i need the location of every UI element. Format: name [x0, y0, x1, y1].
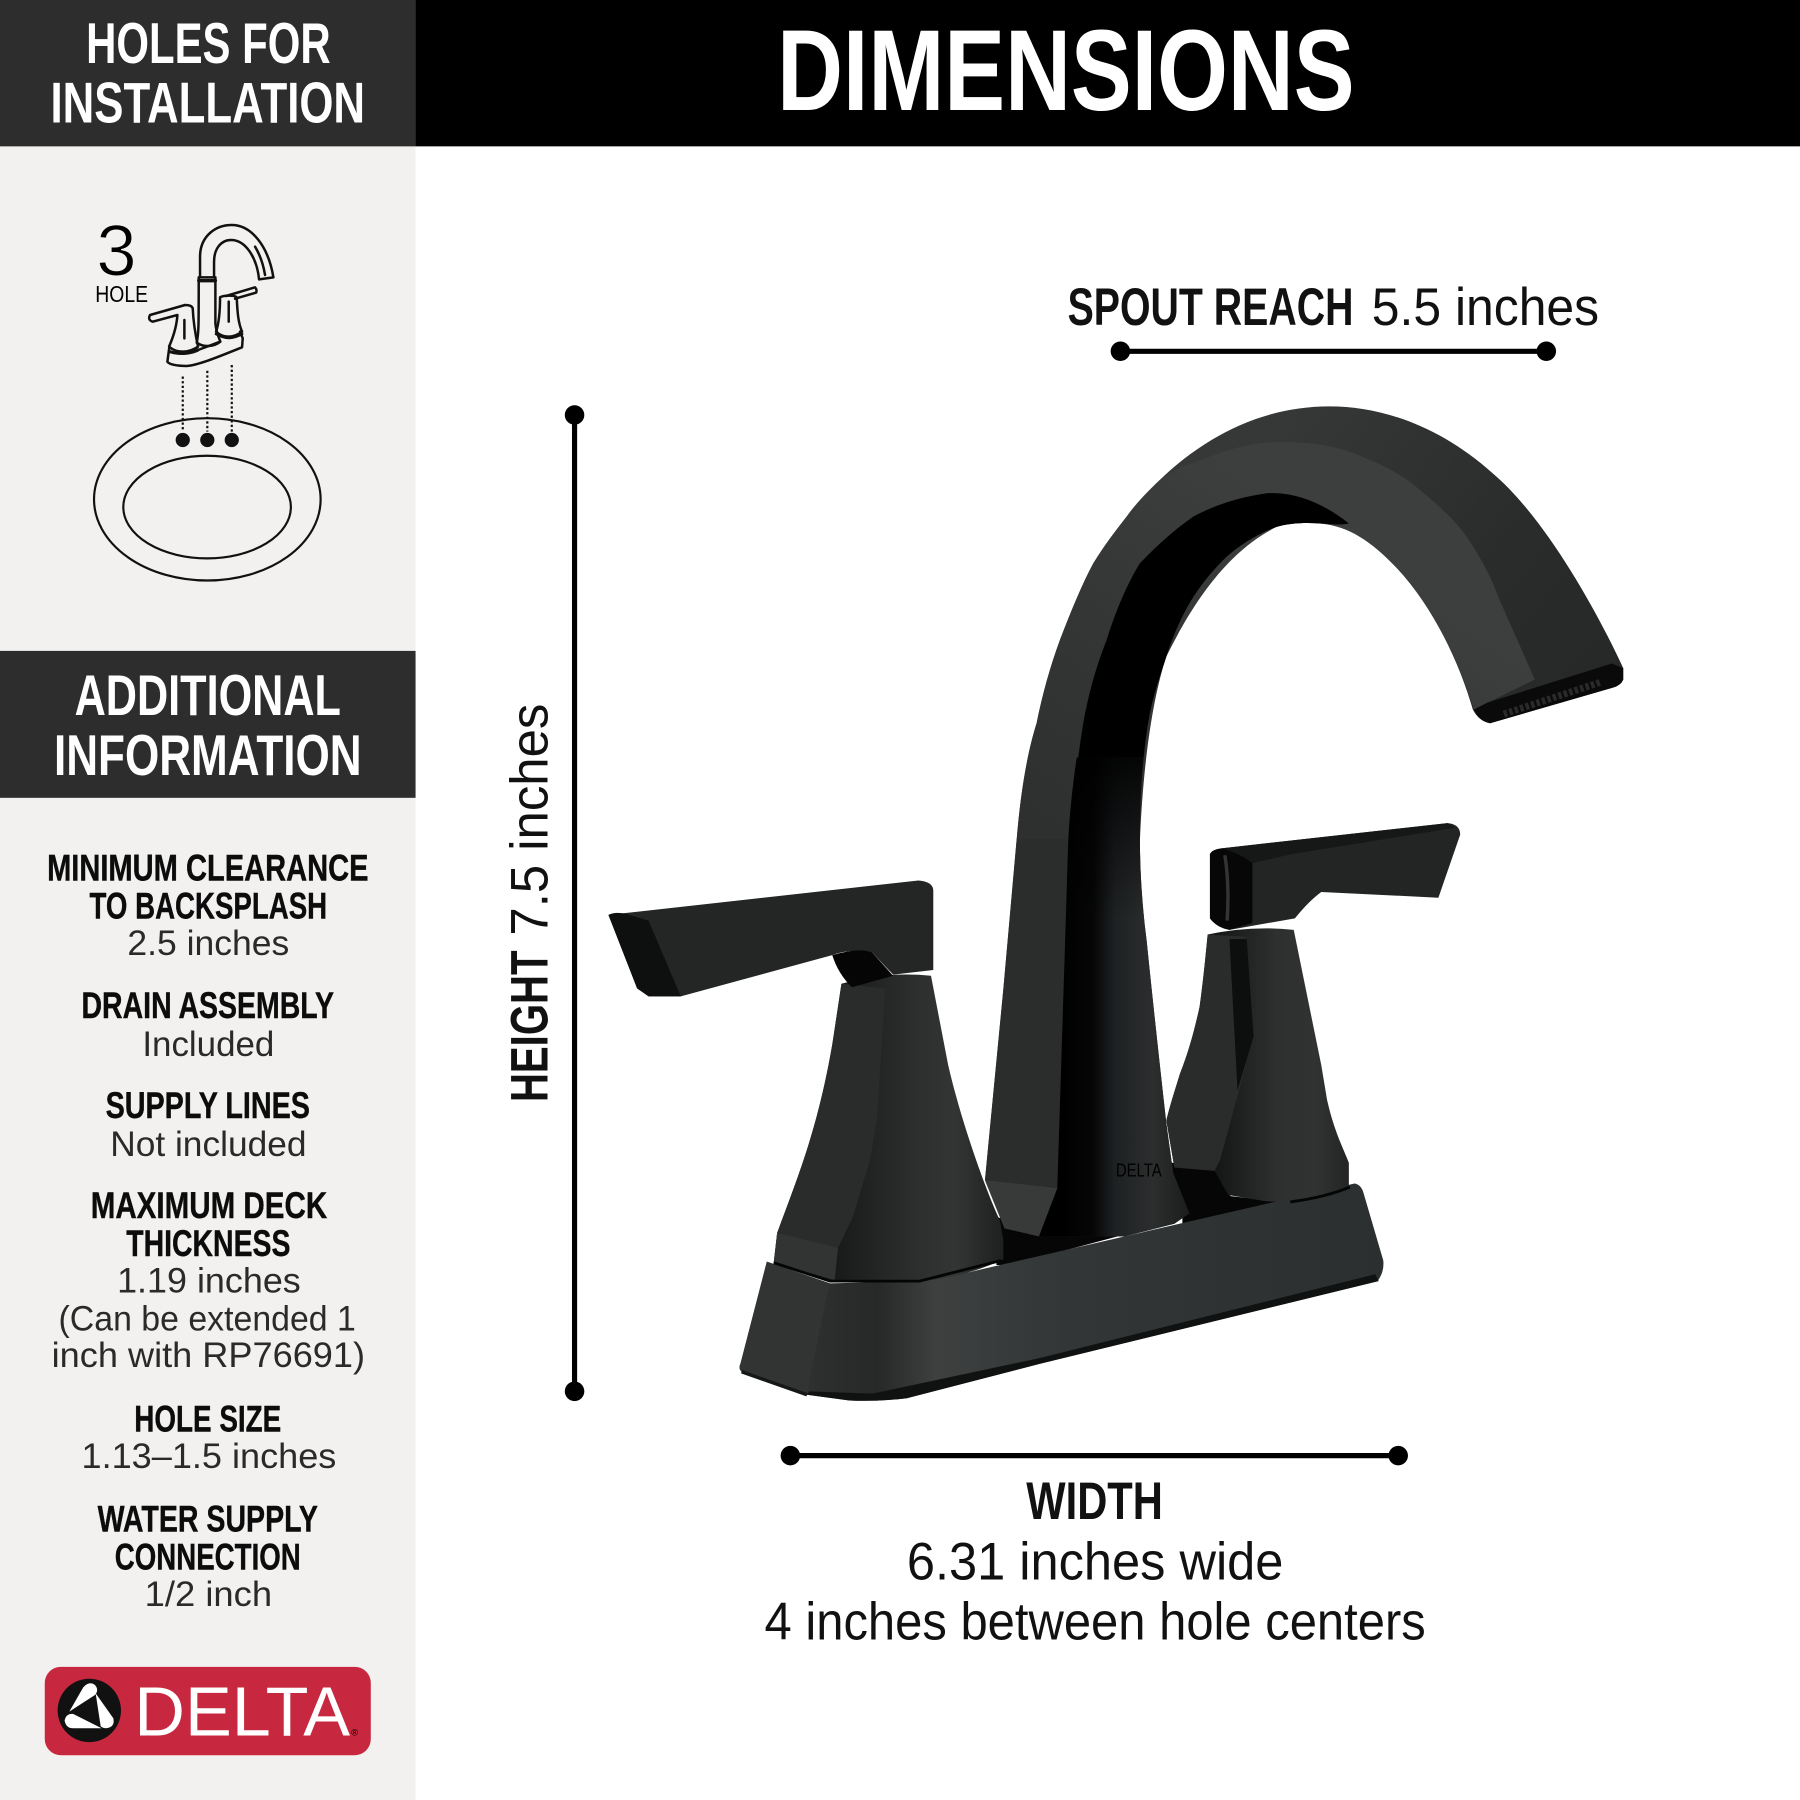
dotted guide lines	[183, 365, 232, 432]
dimension: width	[765, 1446, 1426, 1651]
spout neck left facet	[985, 839, 1070, 1187]
dimension: spout reach: SPOUT REACH	[1068, 278, 1353, 337]
label: 3 hole: HOLE	[95, 281, 148, 307]
text block: hole size: 1.13–1.5 inches	[82, 1436, 336, 1476]
neck fade into black strip	[1065, 758, 1145, 918]
mounting holes	[176, 433, 239, 447]
dimension: width: 4 inches between hole centers	[765, 1592, 1426, 1651]
text block: minimum clearance	[47, 847, 368, 963]
spout neck	[1039, 758, 1189, 1236]
text block: drain assembly: DRAIN ASSEMBLY	[82, 985, 334, 1026]
label: 3 hole: 3	[96, 212, 137, 292]
logo: delta: ®	[351, 1728, 358, 1738]
text block: maximum deck thickness	[52, 1185, 365, 1375]
heading: additional information: INFORMATION	[54, 724, 362, 788]
sink basin	[123, 456, 291, 558]
text block: drain assembly: Included	[142, 1024, 274, 1064]
dimension: spout reach: 5.5 inches	[1372, 278, 1599, 337]
dimension: height: HEIGHT	[501, 951, 560, 1102]
text block: drain assembly	[82, 985, 334, 1064]
right handle lever	[1210, 823, 1460, 930]
text block: hole size: HOLE SIZE	[134, 1399, 281, 1440]
neck lower facet	[985, 1180, 1057, 1236]
text block: minimum clearance: 2.5 inches	[127, 923, 289, 963]
text block: supply lines: SUPPLY LINES	[106, 1085, 310, 1126]
sink outer rim	[94, 418, 321, 581]
text block: maximum deck thickness: (Can be extended 1	[59, 1298, 356, 1338]
text block: water supply connection: CONNECTION	[115, 1536, 301, 1577]
product: black faucet	[608, 406, 1623, 1401]
spout inner black strip	[1070, 493, 1349, 840]
spout	[985, 406, 1623, 1236]
text block: maximum deck thickness: THICKNESS	[126, 1223, 290, 1264]
left handle body	[774, 975, 1003, 1281]
spout lighter band	[1017, 442, 1535, 840]
heading: holes for installation: HOLES FOR	[86, 12, 331, 76]
text block: hole size	[82, 1399, 336, 1476]
neck logo: DELTA	[1116, 1160, 1162, 1181]
label: 3 hole	[95, 212, 148, 307]
dimension: width: 6.31 inches wide	[907, 1533, 1283, 1592]
heading: holes for installation	[0, 0, 416, 146]
deck plate	[740, 1184, 1383, 1401]
text block: water supply connection: 1/2 inch	[145, 1574, 272, 1614]
dimension: height	[501, 405, 584, 1401]
dimension: height: 7.5 inches	[501, 704, 560, 936]
heading: additional information	[0, 651, 416, 798]
icon: three-hole faucet and sink	[94, 212, 321, 581]
heading: additional information: ADDITIONAL	[75, 664, 341, 728]
text block: supply lines: Not included	[110, 1124, 307, 1164]
icon: mini faucet line drawing	[149, 225, 273, 366]
title: dimensions	[416, 0, 1800, 146]
text block: minimum clearance: TO BACKSPLASH	[90, 885, 327, 926]
shadows under bodies	[996, 1162, 1293, 1265]
dimension: spout reach	[1068, 278, 1599, 361]
dimension: width: WIDTH	[1026, 1472, 1163, 1531]
title: dimensions: DIMENSIONS	[777, 7, 1355, 135]
logo: delta	[45, 1667, 371, 1755]
panel: sidebar background	[0, 146, 416, 1800]
text block: maximum deck thickness: 1.19 inches	[117, 1261, 301, 1301]
text block: maximum deck thickness: MAXIMUM DECK	[91, 1185, 328, 1226]
text block: maximum deck thickness: inch with RP76691)	[52, 1335, 365, 1375]
right handle body	[1166, 928, 1350, 1202]
left handle lever	[608, 880, 933, 996]
text block: water supply connection	[98, 1498, 318, 1614]
heading: holes for installation: INSTALLATION	[51, 71, 365, 135]
text block: supply lines	[106, 1085, 310, 1164]
text block: water supply connection: WATER SUPPLY	[98, 1498, 318, 1539]
text block: minimum clearance: MINIMUM CLEARANCE	[47, 847, 368, 888]
logo: delta: DELTA	[134, 1673, 350, 1751]
aerator	[1474, 664, 1623, 723]
